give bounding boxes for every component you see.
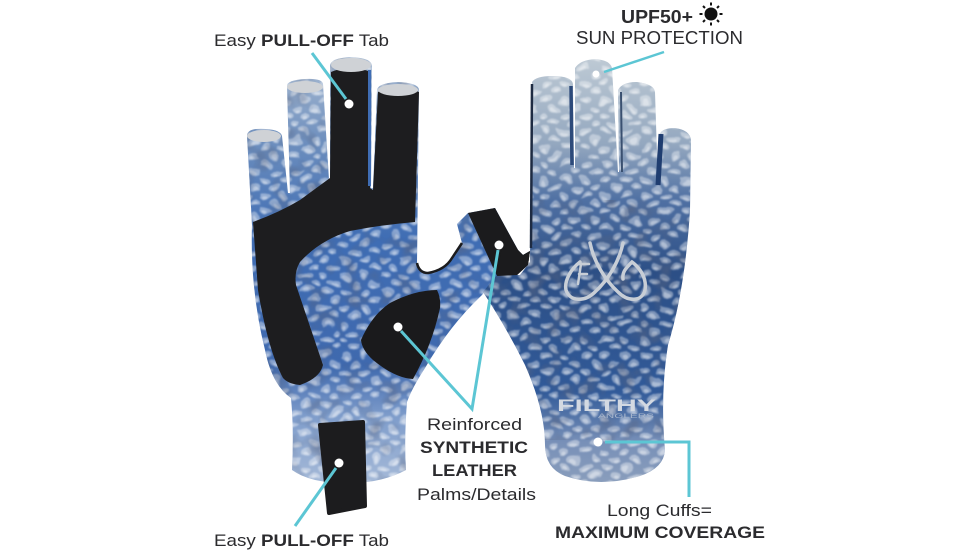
blue strip on middle finger [368, 70, 371, 186]
leader line [312, 53, 346, 99]
label: Easy PULL-OFF Tab [214, 531, 389, 550]
icon: sun [700, 2, 722, 26]
thumb cap over right glove [497, 228, 530, 276]
left glove (palm side) [247, 57, 530, 515]
leader line [604, 52, 664, 72]
infographic canvas [216, 2, 764, 550]
thenar leather patch [361, 290, 440, 379]
hooks logo [566, 243, 645, 299]
label lines: SYNTHETIC [420, 438, 528, 457]
sun protection callout [576, 2, 743, 78]
UPF heading: UPF50+ [621, 7, 693, 27]
web seam [417, 243, 462, 273]
marker [344, 100, 354, 108]
marker [592, 70, 600, 78]
marker on thumb [494, 240, 504, 250]
elbow leader line [605, 442, 689, 497]
black palm patch [253, 68, 419, 385]
label line two: MAXIMUM COVERAGE [555, 523, 765, 542]
finger shadows [531, 84, 661, 248]
leader line [295, 468, 336, 526]
sub heading: SUN PROTECTION [576, 28, 743, 48]
FILTHY brand mark: ANGLERS [598, 414, 654, 420]
right glove (back side) [483, 59, 691, 482]
forked leader lines [401, 250, 498, 409]
left glove fabric [247, 57, 530, 482]
right glove fabric [483, 59, 691, 482]
FILTHY brand mark: FILTHY [557, 396, 657, 415]
thumb leather patch [468, 208, 530, 276]
label lines: Reinforced [427, 415, 522, 434]
label lines [417, 415, 536, 504]
finger cuffs [247, 58, 418, 142]
bottom pull-off tab callout [214, 458, 389, 550]
top pull-off tab callout [214, 31, 389, 108]
marker [594, 438, 602, 446]
marker on palm [394, 322, 402, 332]
label lines: LEATHER [432, 461, 517, 480]
pull-off tab at wrist [320, 422, 365, 513]
label lines: Palms/Details [417, 485, 536, 504]
marker [334, 458, 344, 468]
label line one: Long Cuffs= [607, 501, 712, 520]
synthetic leather callout [394, 240, 536, 504]
label: Easy PULL-OFF Tab [214, 31, 389, 50]
FILTHY brand mark [557, 396, 657, 420]
long cuffs callout [555, 438, 765, 542]
